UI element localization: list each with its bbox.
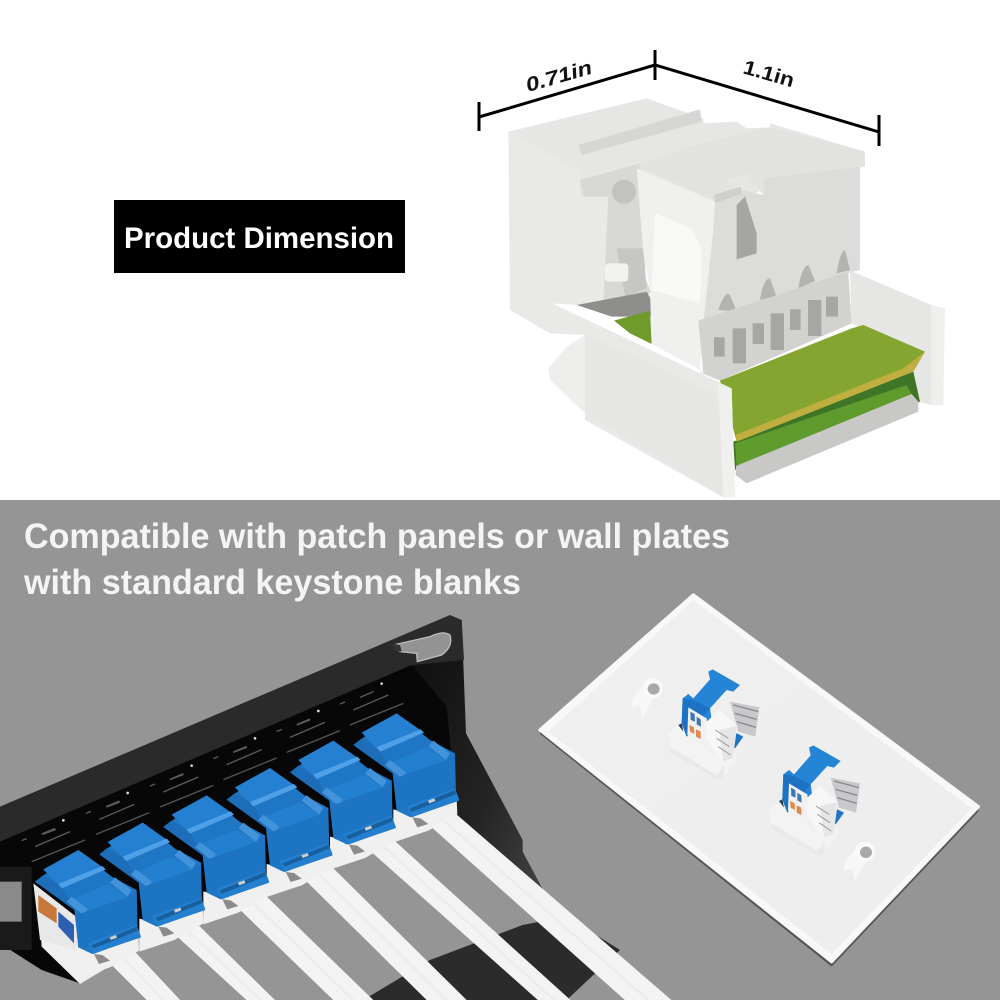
keystone jack product photo (508, 98, 945, 497)
plate shadow (540, 730, 978, 967)
lower circuit board (735, 385, 918, 483)
cable 5 (362, 837, 572, 1000)
compatibility heading: with standard keystone blanks (23, 563, 521, 602)
grey lower panel (0, 500, 1000, 1000)
body top (508, 98, 865, 273)
centre block right face (703, 167, 860, 320)
jack 3 (163, 795, 269, 924)
plate outer rim (540, 595, 978, 962)
jack 1 with label side (33, 850, 141, 984)
bottom keystone (769, 745, 860, 855)
plate inner face (548, 600, 972, 954)
side recess (577, 163, 653, 344)
patch panel photo (0, 615, 673, 1000)
jack 5 (290, 741, 396, 870)
dimension line: width and length (479, 50, 879, 146)
panel top lip (0, 615, 464, 843)
top screw (631, 678, 663, 718)
slot marks (0, 682, 403, 862)
cable 4 (298, 863, 468, 1000)
jack 4 (227, 768, 333, 897)
cable 1 (107, 950, 182, 1000)
left face (508, 132, 610, 333)
top keystone (668, 669, 759, 779)
product dimension label (114, 200, 405, 273)
upper circuit board (720, 325, 925, 442)
lower comb block (698, 272, 852, 381)
centre block top (637, 127, 865, 201)
label: 1.1in: 1.1in (741, 57, 797, 92)
jack 2 (99, 823, 205, 952)
product dimension label: Product Dimension (124, 222, 394, 255)
compatibility heading: Compatible with patch panels or wall plates (24, 517, 730, 556)
label: 0.71in: 0.71in (523, 57, 595, 97)
centre block left face (637, 168, 720, 381)
board gap shadow (733, 372, 920, 470)
wall plate photo (540, 595, 978, 967)
panel port opening (0, 867, 32, 950)
jack 6 (353, 713, 459, 842)
compatibility heading (23, 517, 730, 602)
front wall (545, 300, 735, 497)
right wall (850, 271, 945, 406)
bottom screw (843, 842, 875, 882)
white background panel (0, 0, 1000, 500)
rear rail bar (363, 917, 620, 1000)
top ridge (578, 109, 702, 155)
mounting slot (392, 633, 451, 662)
cable 3 (233, 893, 375, 1000)
cable 2 (170, 923, 277, 1000)
panel flange (412, 620, 547, 897)
cable 6 (422, 812, 673, 1000)
teeth (718, 250, 850, 311)
panel rear face (0, 665, 457, 983)
